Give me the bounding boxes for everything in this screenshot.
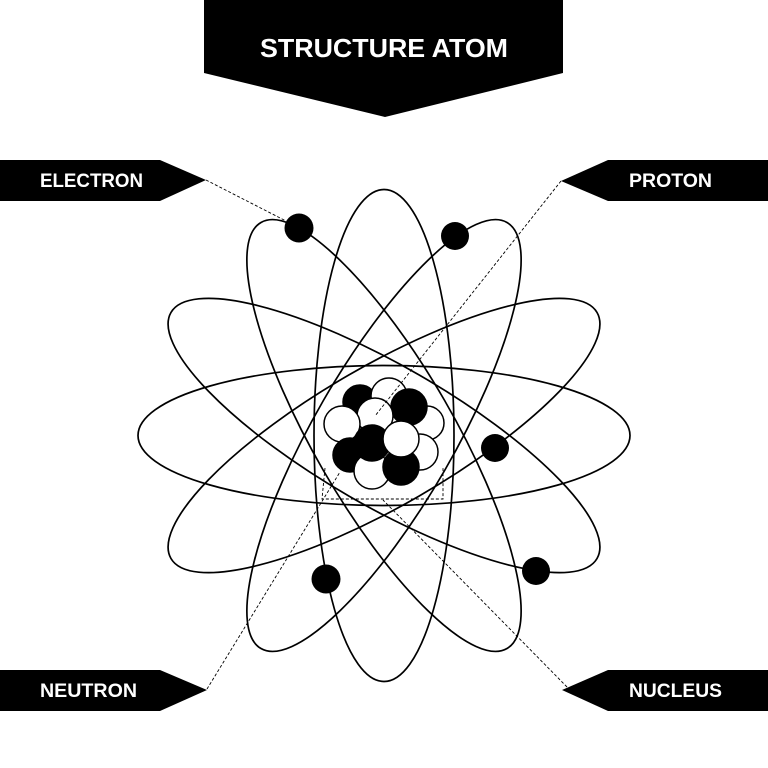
orbits [136, 187, 632, 684]
label: electron [0, 160, 206, 201]
title banner: STRUCTURE ATOM [260, 33, 508, 63]
label: proton: PROTON [629, 171, 712, 192]
label: nucleus [562, 670, 768, 711]
leader lines [206, 180, 567, 689]
label: neutron [0, 670, 207, 711]
label: proton [561, 160, 768, 201]
label: neutron: NEUTRON [40, 681, 137, 702]
label: electron: ELECTRON [40, 171, 143, 192]
electrons [284, 214, 550, 594]
label: nucleus: NUCLEUS [629, 681, 722, 702]
title banner [204, 0, 563, 117]
atom diagram [136, 187, 632, 684]
nucleus [324, 378, 444, 489]
